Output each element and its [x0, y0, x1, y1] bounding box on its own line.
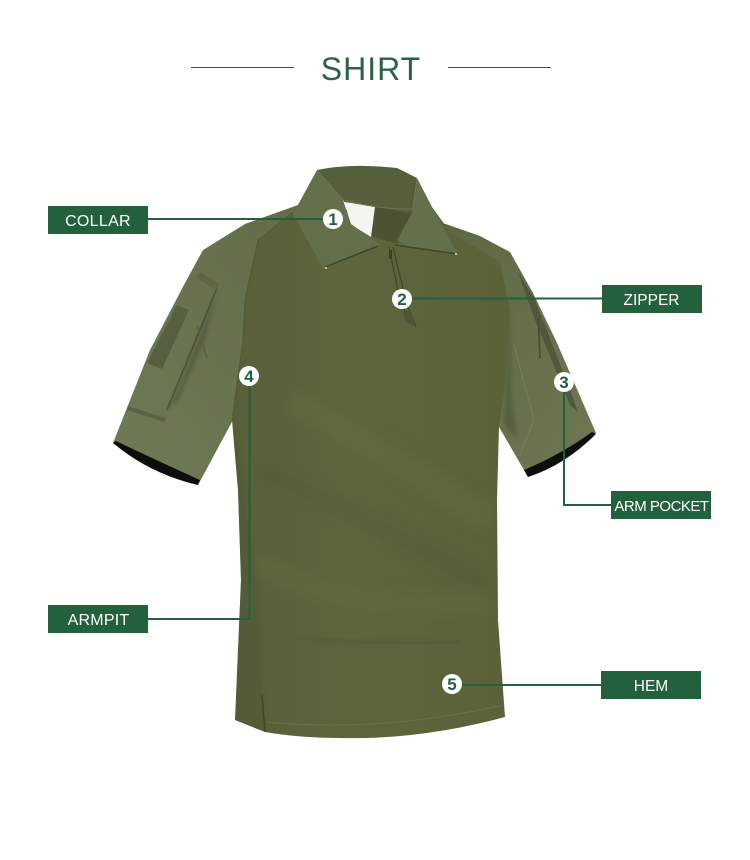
callout 2: zipper: ZIPPER [624, 292, 679, 309]
callout 4: armpit: ARMPIT [68, 612, 129, 629]
zipper placket [389, 247, 416, 327]
callout 3: arm pocket: 3 [559, 373, 569, 392]
neck label [345, 202, 375, 237]
callout 1: collar [48, 206, 343, 234]
callout 4: armpit: 4 [244, 367, 254, 386]
callout 4: armpit [48, 366, 259, 633]
callout 5: hem [442, 671, 701, 699]
callout 3: arm pocket [554, 372, 711, 519]
body [232, 207, 510, 738]
callout 3: arm pocket: ARM POCKET [614, 498, 709, 515]
callout 2: zipper [392, 285, 702, 313]
right sleeve [425, 205, 596, 477]
collar [293, 166, 457, 269]
callout 5: hem: HEM [634, 678, 668, 695]
shirt illustration [113, 166, 596, 738]
callout 2: zipper: 2 [397, 290, 407, 309]
callout 1: collar: 1 [328, 210, 338, 229]
neck fleece [371, 207, 412, 244]
callout 1: collar: COLLAR [65, 213, 131, 230]
shoulder seams [232, 212, 293, 420]
callout 5: hem: 5 [447, 675, 457, 694]
infographic: shirt anatomy [48, 57, 711, 738]
title: SHIRT [321, 51, 421, 87]
left sleeve [113, 205, 305, 485]
